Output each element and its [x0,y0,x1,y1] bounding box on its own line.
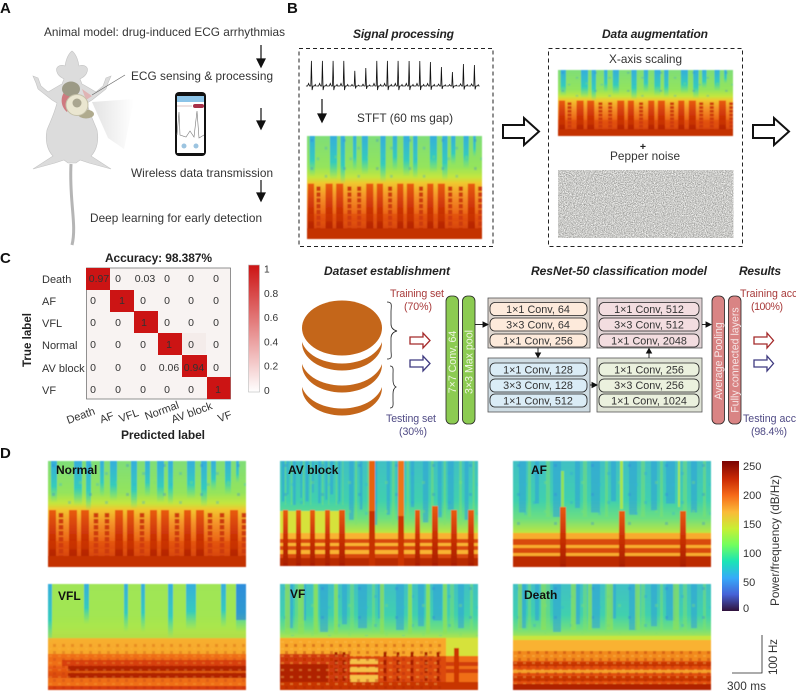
text: training accuracy: (100%) [751,301,783,313]
layer: 7x7 conv: 7×7 Conv, 64 [447,331,459,393]
colour bar: power/frequency: Power/frequency (dB/Hz) [768,475,782,606]
layer: 7x7 conv [446,296,459,424]
matrix values: 0 [140,384,146,396]
spectrogram: VFL: VFL [58,589,81,603]
scale bar: 300 ms [727,679,766,693]
panel label: C: C [0,250,11,267]
y tick labels: AF [42,296,56,308]
text: testing set [386,413,436,438]
spectrogram: AV block: AV block [288,463,339,477]
matrix values: 0 [188,384,194,396]
panel A: ECG workflow [33,25,285,245]
block: conv 512: 1×1 Conv, 2048 [611,336,687,348]
text: testing set: (30%) [399,426,427,438]
block: conv 512: 1×1 Conv, 512 [614,304,684,316]
layer: max pool: 3×3 Max pool [464,330,476,394]
matrix values: 0.94 [184,362,204,374]
matrix values: 1 [141,317,147,329]
block: conv 512: 3×3 Conv, 512 [614,320,684,332]
matrix values: 0 [188,295,194,307]
panel label: B: B [287,0,298,17]
icon: smartphone [175,92,206,156]
block: conv 128: 1×1 Conv, 128 [503,364,573,376]
panel: data augmentation [548,27,742,246]
text: training set: (70%) [404,301,432,313]
colour bar: power/frequency [722,461,782,615]
text: deep learning: Deep learning for early detection [90,211,262,225]
ECG trace [306,61,480,90]
connector arrows [475,322,711,388]
block: conv 128 [488,358,590,412]
colour bar: power/frequency: 150 [743,519,761,531]
arrow: hollow 1 [503,118,539,145]
colour bar: power/frequency: 0 [743,603,749,615]
icon: database stack [301,300,383,416]
brace: testing [390,366,396,408]
block: conv 128: 3×3 Conv, 128 [503,380,573,392]
text: training accuracy [740,288,796,313]
spectrogram: VF [280,584,478,690]
matrix values: 0 [115,384,121,396]
matrix values: 0 [140,339,146,351]
block: conv 128: 1×1 Conv, 512 [503,396,573,408]
layer: average pooling: Average Pooling [713,322,725,400]
matrix values: 0 [164,273,170,285]
text: training accuracy: Training acc [740,288,796,300]
panel: signal processing [299,27,493,246]
matrix values: 0 [164,317,170,329]
matrix values: 0 [188,339,194,351]
arrow: blue [754,356,774,371]
matrix values: 0 [213,317,219,329]
panel: confusion matrix [22,251,278,442]
axis label: predicted: Predicted label [121,428,205,442]
colour bar [248,264,278,397]
text: wireless transmission: Wireless data transmission [131,166,273,180]
text: testing accuracy: Testing acc [743,413,796,425]
matrix values: 0 [115,273,121,285]
matrix values: 0.03 [135,273,155,285]
arrow: down 2 [257,108,265,129]
heading: Data augmentation [602,27,708,41]
dashed frame [299,48,493,246]
panel label: D: D [0,445,11,462]
matrix values: 0 [213,273,219,285]
spectrogram: AF [513,461,711,567]
matrix values: 0.97 [89,273,109,285]
spectrogram: Death [513,584,711,690]
matrix values: 0 [213,362,219,374]
matrix values: 0 [140,295,146,307]
colour bar: power/frequency: 100 [743,548,761,560]
matrix values: 0 [90,362,96,374]
spectrogram: Normal: Normal [56,463,97,477]
arrow: hollow 2 [753,118,789,145]
text: x-axis scaling: X-axis scaling [609,52,682,66]
heading: Signal processing [353,27,455,41]
colour bar: power/frequency: 250 [743,461,761,473]
matrix values: 0 [164,295,170,307]
x tick labels [65,399,234,427]
arrow: down 1 [257,45,265,67]
colour bar: power/frequency: 200 [743,490,761,502]
heading: Results [739,264,781,278]
matrix grid [86,268,230,399]
text: STFT: STFT (60 ms gap) [357,111,453,125]
x tick labels: VF [216,409,234,425]
y tick labels: VFL [42,318,62,330]
x tick labels: Death [65,406,97,427]
arrow: red [410,333,430,348]
text: ECG sensing: ECG sensing & processing [131,69,273,83]
layer: max pool [462,296,476,424]
colour bar: 0.2 [264,362,278,372]
brace: training [387,302,397,359]
heading: Dataset establishment [324,264,451,278]
panel: ResNet-50 model [446,264,742,424]
matrix values: 0 [115,339,121,351]
text: training set [390,288,444,313]
matrix values: 1 [166,339,172,351]
text: testing set: Testing set [386,413,436,425]
block: conv 256 [597,358,702,412]
block: conv 256: 1×1 Conv, 256 [614,364,684,376]
matrix values: 1 [215,384,221,396]
arrow: blue [410,356,430,371]
matrix values: 0 [115,362,121,374]
panel label: A: A [0,0,11,17]
arrow: down 3 [257,180,265,201]
text: pepper noise: Pepper noise [610,149,680,163]
block: conv 64: 3×3 Conv, 64 [506,320,570,332]
heading: ResNet-50 classification model [531,264,708,278]
x tick labels: Normal [143,399,181,423]
layer: fully connected: Fully connected layers [730,307,742,413]
matrix values: 0 [115,317,121,329]
matrix values: 1 [119,295,125,307]
colour bar: 1 [264,264,270,276]
axis label: true: True label [22,313,34,367]
spectrogram: VFL [48,584,246,690]
x tick labels: AF [98,410,116,426]
x tick labels: VFL [117,407,141,425]
matrix values: 0 [140,362,146,374]
matrix values: 0 [90,339,96,351]
matrix values: 0.06 [159,362,179,374]
colour bar: 0.4 [264,338,278,348]
arrow: to STFT [318,99,326,122]
matrix values: 0 [213,339,219,351]
block: conv 512 [597,298,702,348]
matrix values [89,273,221,396]
scale bar [727,635,780,693]
scale bar: 100 Hz [766,639,780,675]
panel: spectrograms [48,461,711,690]
icon: mouse [33,51,134,245]
spectrogram: AV block [280,461,478,566]
spectrogram: Normal [48,461,246,567]
colour bar: 0.8 [264,289,278,300]
colour bar: power/frequency: 50 [743,577,755,589]
x tick labels: AV block [170,400,215,426]
colour bar: 0 [264,386,270,397]
dashed frame [548,48,742,246]
matrix values: 0 [90,384,96,396]
layer: average pooling [712,296,725,424]
text: testing accuracy [743,413,796,438]
panel: dataset establishment [301,264,451,438]
matrix values: 0 [213,295,219,307]
matrix values: 0 [188,273,194,285]
matrix values: 0 [90,317,96,329]
text: training set: Training set [390,288,444,300]
spectrogram: VF: VF [290,587,305,601]
spectrogram: AF: AF [531,463,547,477]
y tick labels: VF [42,385,56,397]
spectrogram: Death: Death [524,588,557,602]
panel: results [739,264,796,438]
block: conv 64: 1×1 Conv, 256 [503,336,573,348]
matrix values: 0 [188,317,194,329]
y tick labels: Death [42,274,71,286]
noise image [558,170,734,238]
text: testing accuracy: (98.4%) [751,426,787,438]
block: conv 256: 3×3 Conv, 256 [614,380,684,392]
arrow: red [754,333,774,348]
block: conv 256: 1×1 Conv, 1024 [611,396,687,408]
colour bar: 0.6 [264,313,278,324]
block: conv 64: 1×1 Conv, 64 [506,304,570,316]
y tick labels: Normal [42,340,77,352]
title: Accuracy: 98.387% [105,251,212,265]
matrix values: 0 [164,384,170,396]
spectrogram scaled [558,70,733,136]
block: conv 64 [488,298,590,348]
y tick labels [42,274,85,397]
matrix values: 0 [90,295,96,307]
y tick labels: AV block [42,363,85,375]
spectrogram [307,136,482,239]
text: animal model: Animal model: drug-induced ECG arrhythmias [44,25,285,39]
plus sign: + [640,141,646,153]
